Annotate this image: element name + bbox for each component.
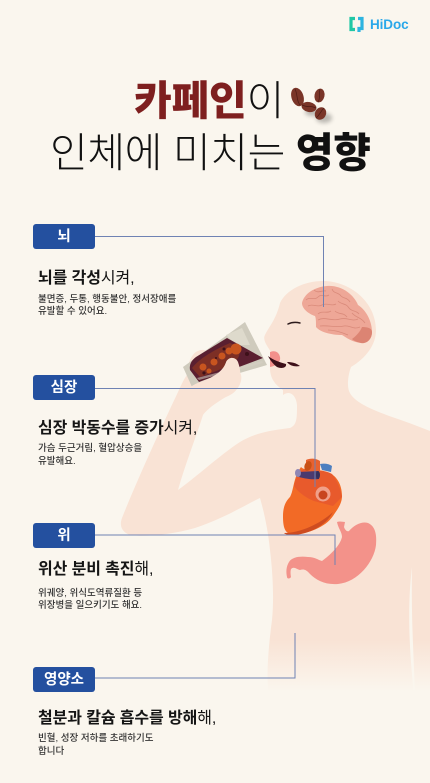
- icon: fingers behind glass: [188, 350, 215, 372]
- section: heart: [33, 375, 197, 466]
- line: stomach: [95, 535, 335, 565]
- description: nutrients: 빈혈, 성장 저하를 초래하기도: [38, 733, 153, 744]
- line: nutrients: [95, 633, 295, 678]
- heading: stomach: 위산 분비 촉진해,: [38, 561, 153, 578]
- icon: eyebrow: [288, 322, 300, 324]
- connector lines: [95, 236, 335, 678]
- section: nutrients: [33, 667, 216, 756]
- title line 1: 카페인이: [134, 78, 284, 124]
- description: heart: 유발해요.: [38, 456, 76, 466]
- logo text: HiDoc: [370, 17, 409, 32]
- icon: heart: [283, 459, 342, 535]
- description: brain: [38, 294, 176, 317]
- body silhouette: [121, 281, 430, 695]
- icon: stomach: [286, 522, 376, 584]
- description: brain: 유발할 수 있어요.: [38, 306, 107, 317]
- badge: stomach: 위: [57, 528, 71, 544]
- icon: coffee drops: [268, 356, 300, 368]
- logo icon: [351, 18, 362, 32]
- section: brain: [33, 224, 176, 317]
- line: heart: [95, 388, 315, 487]
- title: [50, 78, 371, 176]
- badge: brain: 뇌: [57, 229, 71, 245]
- title line 2: 인체에 미치는 영향: [50, 130, 371, 176]
- description: stomach: 위궤양, 위식도역류질환 등: [38, 588, 142, 598]
- description: stomach: [38, 588, 142, 611]
- badge: nutrients: [33, 667, 95, 692]
- badge: nutrients: 영양소: [44, 672, 84, 688]
- badge: stomach: [33, 523, 95, 548]
- description: nutrients: [38, 732, 154, 756]
- line: brain: [95, 236, 324, 307]
- badge: heart: 심장: [51, 380, 77, 396]
- icon: lips: [270, 351, 280, 367]
- badge: heart: [33, 375, 95, 400]
- section: stomach: [33, 523, 153, 611]
- heading: brain: 뇌를 각성시켜,: [38, 270, 134, 287]
- badge: brain: [33, 224, 95, 249]
- icon: hand holding glass: [180, 358, 240, 402]
- description: heart: 가슴 두근거림, 혈압상승을: [38, 443, 142, 454]
- icon: coffee glass: [183, 322, 267, 387]
- description: stomach: 위장병을 일으키기도 해요.: [38, 600, 142, 611]
- icon: coffee beans: [289, 86, 332, 123]
- description: heart: [38, 442, 142, 466]
- description: brain: 불면증, 두통, 행동불안, 정서장애를: [38, 294, 176, 304]
- icon: brain: [302, 286, 372, 343]
- heading: nutrients: 철분과 칼슘 흡수를 방해해,: [38, 710, 216, 727]
- heading: heart: 심장 박동수를 증가시켜,: [38, 420, 197, 437]
- description: nutrients: 합니다: [38, 746, 64, 756]
